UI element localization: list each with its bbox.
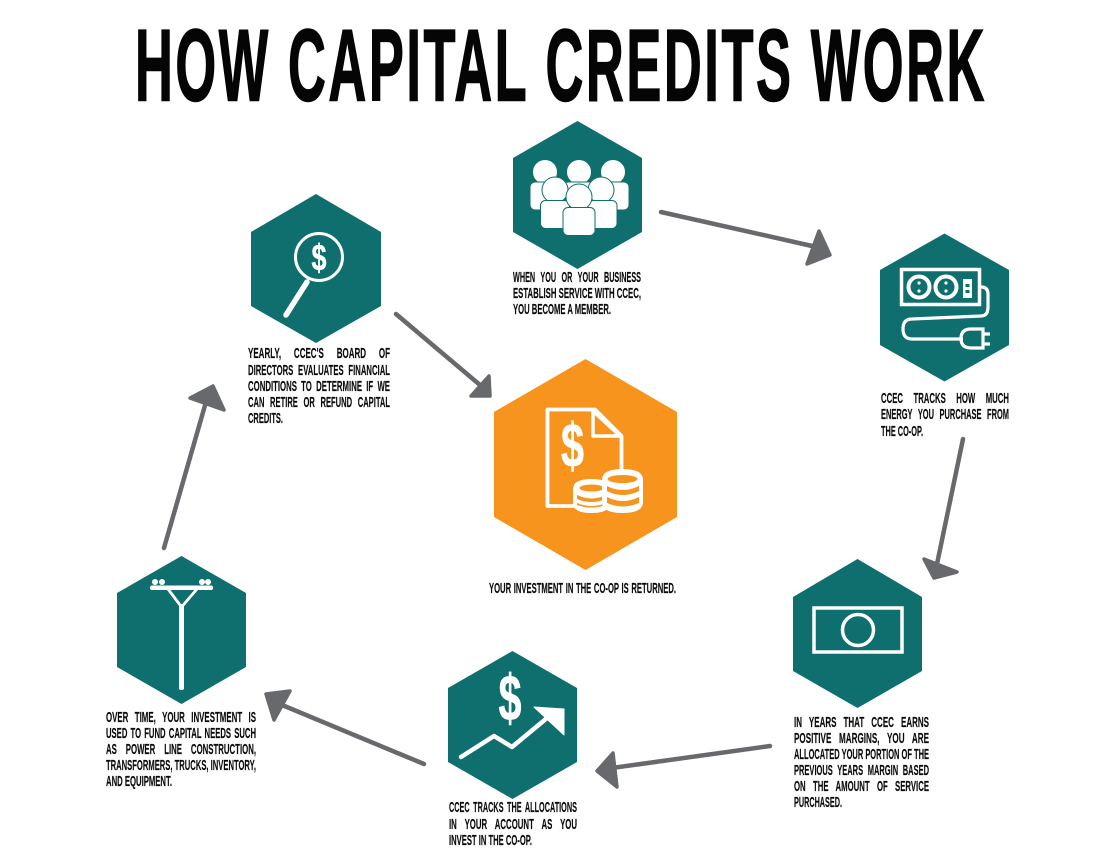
text: step 6: CREDITS. <box>248 410 283 427</box>
hexagon: step 1 <box>513 121 642 269</box>
step 5: capital needs <box>106 556 256 790</box>
icon: document with dollar and coins <box>548 410 643 513</box>
hexagon: step 5 <box>117 556 246 704</box>
text: step 3 <box>794 714 929 811</box>
arrow: step 5 to step 6 <box>164 386 224 548</box>
text: step 6: CAN RETIRE OR REFUND CAPITAL <box>248 394 390 411</box>
text: step 6: DIRECTORS EVALUATES FINANCIAL <box>248 362 390 379</box>
icon: document with dollar and coins: $ <box>561 412 584 481</box>
arrow: step 2 to step 3 <box>924 439 963 578</box>
icon: magnifier with dollar <box>286 234 342 315</box>
text: step 4: INVEST IN THE CO-OP. <box>449 832 532 849</box>
icon: utility pole <box>150 579 213 690</box>
text: CCEC TRACKS THE ALLOCATIONS <box>449 799 577 816</box>
text: step 6: CONDITIONS TO DETERMINE IF WE <box>248 378 390 395</box>
step 3: positive margins <box>793 559 929 811</box>
text: WHEN YOU OR YOUR BUSINESS <box>513 269 641 286</box>
text: step 5: AS POWER LINE CONSTRUCTION, <box>106 741 256 758</box>
icon: magnifier with dollar: $ <box>312 237 327 278</box>
hexagon: step 6 <box>251 194 381 343</box>
text: step 5 <box>106 709 256 790</box>
hexagon: center <box>494 359 677 570</box>
text: step 3: IN YEARS THAT CCEC EARNS <box>794 714 929 731</box>
text: step 5: OVER TIME, YOUR INVESTMENT IS <box>106 709 256 726</box>
text: step 3: PREVIOUS YEARS MARGIN BASED <box>794 762 929 779</box>
icon: dollar and rising arrow: $ <box>498 661 522 734</box>
icon: banknote <box>814 608 902 652</box>
icon: group of people <box>530 160 629 236</box>
icon: dollar and rising arrow <box>461 661 564 757</box>
text: step 6: YEARLY, CCEC'S BOARD OF <box>248 345 390 362</box>
hexagon: step 2 <box>880 234 1009 382</box>
text: step 4 <box>449 799 577 849</box>
text: step 1 <box>513 269 641 318</box>
text: ALLOCATED YOUR PORTION OF THE <box>794 746 929 763</box>
text: step 5: TRANSFORMERS, TRUCKS, INVENTORY, <box>106 757 256 774</box>
text: step 3: PURCHASED. <box>794 794 842 811</box>
hexagon: step 3 <box>793 559 922 708</box>
text: step 4: IN YOUR ACCOUNT AS YOU <box>449 816 577 833</box>
step 4: allocations <box>448 651 577 849</box>
step 2: energy tracking <box>880 234 1009 440</box>
center: investment returned <box>489 359 677 597</box>
step 6: board evaluation <box>248 194 390 427</box>
text: step 5: USED TO FUND CAPITAL NEEDS SUCH <box>106 725 256 742</box>
icon: power strip and plug <box>902 270 990 348</box>
text: step 2: THE CO-OP. <box>881 423 923 440</box>
arrow: step 6 to center <box>396 314 490 396</box>
text: step 1: ESTABLISH SERVICE WITH CCEC, <box>513 285 641 302</box>
arrow: step 1 to step 2 <box>661 212 830 264</box>
hexagon: step 4 <box>448 651 577 799</box>
text: center: YOUR INVESTMENT IN THE CO-OP IS RETURNED. <box>489 580 676 597</box>
text: step 2 <box>881 390 1009 440</box>
text: step 6 <box>248 345 390 427</box>
text: step 3: ON THE AMOUNT OF SERVICE <box>794 778 929 795</box>
step 1: become a member <box>513 121 642 318</box>
arrow: step 3 to step 4 <box>597 746 770 787</box>
arrow: step 4 to step 5 <box>266 691 424 764</box>
text: step 1: YOU BECOME A MEMBER. <box>513 301 611 318</box>
text: step 5: AND EQUIPMENT. <box>106 773 172 790</box>
text: step 3: POSITIVE MARGINS, YOU ARE <box>794 730 929 747</box>
